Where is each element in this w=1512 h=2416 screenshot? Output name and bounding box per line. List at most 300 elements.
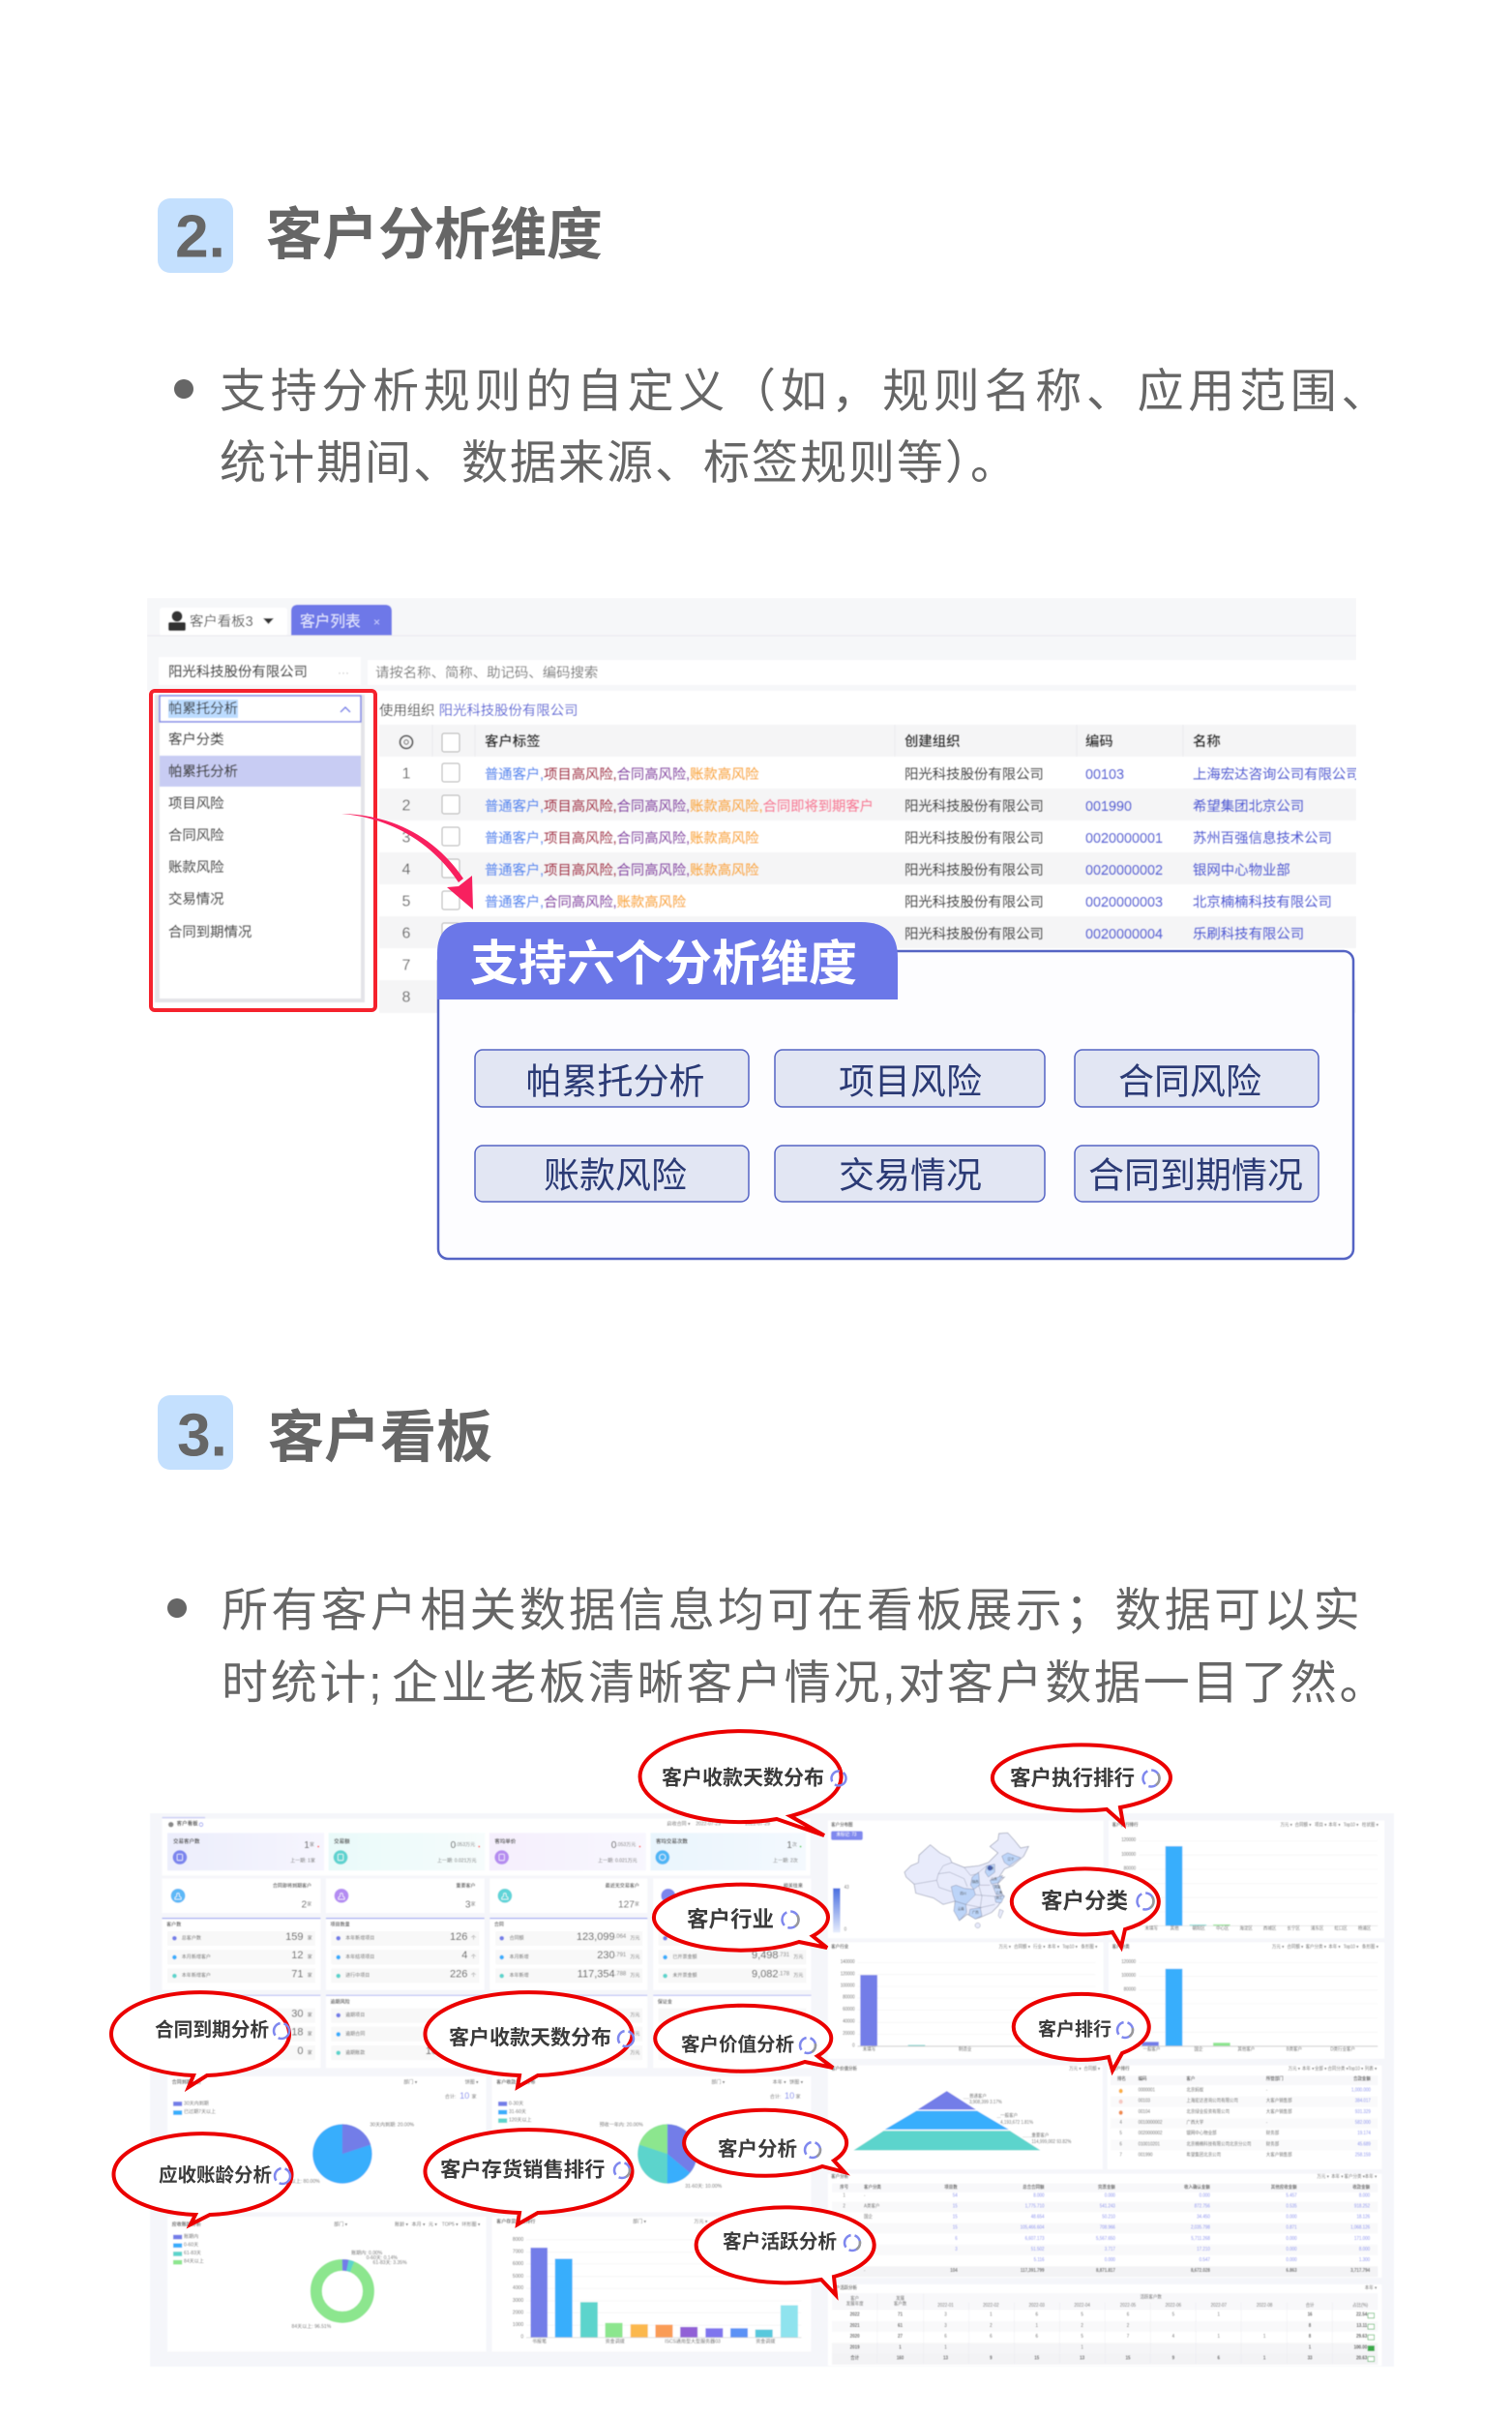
- table: customer activity: 1: [1081, 2344, 1083, 2351]
- table: customer activity: 1: [899, 2344, 902, 2351]
- table rows: 普通客户,项目高风险,合同高风险,账款高风险: [485, 766, 759, 783]
- metric cards row 1: 71: [291, 1968, 304, 1980]
- table rows: 5: [402, 894, 411, 910]
- table: customer analysis: 8.000: [1359, 2192, 1370, 2199]
- chart: receipt days pie: 部门 ▾: [711, 2078, 726, 2085]
- chart: receivables aging donut: TOP5 ▾: [442, 2222, 459, 2227]
- callout: 客户分类: 客户分类: [1041, 1889, 1128, 1914]
- chart: receipt days pie: 0-30天: [509, 2101, 523, 2106]
- bar chart: customer category: 国企: [1195, 2045, 1203, 2053]
- metric cards row 1: 家: [308, 1972, 312, 1979]
- table: customer activity: 合计: [1306, 2302, 1315, 2309]
- bar chart: customer category: B类客户: [1287, 2045, 1302, 2053]
- dimension button: 账款风险: [475, 1146, 749, 1202]
- KPI cards: 2家: [302, 1899, 311, 1910]
- chart: inventory sales ranking bars: 4000: [513, 2285, 523, 2291]
- dimension button: 账款风险: 账款风险: [544, 1155, 687, 1196]
- table: customer analysis: 收入确认金额: [1184, 2184, 1210, 2191]
- callout: 客户价值分析: 客户价值分析: [681, 2034, 794, 2055]
- callout: 客户分类: [1012, 1868, 1159, 1947]
- chart: inventory sales ranking bars: 0: [520, 2334, 523, 2340]
- table: customer analysis: 3.717: [1105, 2247, 1115, 2252]
- table rows: 阳光科技股份有限公司: [904, 894, 1044, 910]
- table: customer analysis: 8,672.028: [1191, 2268, 1210, 2274]
- table: customer activity: 15: [1125, 2355, 1131, 2362]
- table rows: 阳光科技股份有限公司: [904, 862, 1044, 879]
- table: customer ranking: 上海宏达咨询公司有限公司: [1186, 2097, 1238, 2104]
- table: customer analysis: 客户分类 ▾: [1345, 2173, 1366, 2180]
- table rows: 8: [402, 989, 411, 1006]
- bar chart: execution ranking: 本年 ▾: [1328, 1821, 1341, 1829]
- table rows: 3: [402, 830, 411, 846]
- chart: contract expiry pie: 10: [460, 2091, 469, 2101]
- table: customer ranking: 客户排行: [1112, 2065, 1130, 2073]
- table rows: [379, 763, 1360, 1013]
- table: customer activity: 29.63: [1356, 2334, 1368, 2340]
- table: customer ranking: [1108, 2065, 1381, 2169]
- callout: 客户行业: [654, 1885, 828, 1951]
- metric cards row 1: 本月新增: [509, 1954, 529, 1960]
- KPI cards: 相关往来: [784, 1883, 803, 1890]
- table: customer ranking: 0020000002: [1139, 2131, 1163, 2136]
- stat cards row: 上一期: 0.021万元: [598, 1858, 637, 1864]
- chart: receivables aging donut: [167, 2217, 487, 2352]
- metric cards row 1: 万元: [793, 1954, 803, 1960]
- pyramid: customer value: 普通客户: [969, 2093, 987, 2100]
- bar chart: customer category: 其他客户: [1237, 2045, 1255, 2053]
- table: customer activity: 6: [1127, 2312, 1130, 2318]
- table: customer analysis: 1,775.710: [1025, 2203, 1045, 2210]
- table: customer analysis: 8.000: [1033, 2192, 1045, 2199]
- table: customer ranking: 银网中心物业部: [1186, 2130, 1217, 2136]
- table: customer analysis: 客户分类: [864, 2184, 881, 2191]
- table: customer ranking: 0000001: [1139, 2087, 1155, 2094]
- table: customer activity: 2022-07: [1211, 2303, 1227, 2309]
- bar chart: customer category: D类行业客户: [1330, 2045, 1355, 2053]
- callout: 客户活跃分析: [697, 2207, 875, 2295]
- table: customer activity: 2022-01: [937, 2303, 954, 2309]
- panel: six analysis dimensions: [437, 922, 1353, 1259]
- table: customer activity: 15: [1034, 2355, 1040, 2362]
- map: China customer distribution: [904, 1833, 1028, 1928]
- metric cards row 2: 万元: [630, 2050, 639, 2056]
- table: customer activity: 1: [1218, 2334, 1220, 2340]
- bar chart: execution ranking: [1109, 1821, 1384, 1938]
- table: customer analysis: 6.863: [1286, 2268, 1297, 2274]
- bar chart: customer category: 合同额 ▾: [1287, 1943, 1304, 1951]
- tabs: 客户看板3: [190, 613, 253, 630]
- table: customer analysis: 54: [953, 2192, 958, 2199]
- table rows: 4: [402, 861, 411, 879]
- metric cards row 1: 总客户数: [182, 1934, 201, 1941]
- metric cards row 2: 30: [291, 2009, 304, 2019]
- bar chart: execution ranking: 客户执行排行: [1112, 1821, 1139, 1829]
- table: customer analysis: 3,717.794: [1350, 2268, 1370, 2274]
- table: customer activity: 3: [944, 2323, 947, 2329]
- stat cards row: [163, 1817, 811, 1875]
- callout: 客户活跃分析: 客户活跃分析: [723, 2231, 837, 2252]
- table: customer ranking: -: [1266, 2088, 1268, 2094]
- bar chart: customer industry: 行业 ▾: [1033, 1943, 1046, 1951]
- table: customer analysis: 5.457: [1286, 2192, 1297, 2199]
- bar chart: execution ranking: 120000: [1121, 1837, 1136, 1843]
- chart: receivables aging donut: 61-83天: 3.35%: [373, 2260, 407, 2266]
- map: China customer distribution: 上海: [995, 1890, 1003, 1894]
- table: customer analysis: 6: [955, 2236, 958, 2242]
- stat cards row: 交易额: [334, 1837, 350, 1845]
- metric cards row 1: 家: [308, 1934, 312, 1941]
- table header: [379, 725, 1356, 757]
- callout: 客户价值分析: [655, 2006, 833, 2072]
- bar chart: execution ranking: Top10 ▾: [1344, 1822, 1359, 1829]
- chart: receipt days pie: [492, 2076, 812, 2212]
- map: China customer distribution: 河南: [994, 1885, 1001, 1890]
- table: customer ranking: 合同分类 ▾: [1327, 2065, 1349, 2073]
- metric cards row 1: 12: [291, 1950, 304, 1961]
- table: customer analysis: 0.000: [1286, 2236, 1297, 2242]
- bar chart: customer category: 条形图 ▾: [1362, 1943, 1379, 1951]
- table: customer analysis: 0.000: [1200, 2192, 1210, 2199]
- table rows: 6: [402, 925, 411, 942]
- table: customer ranking: 北京蚂蚁: [1186, 2086, 1203, 2094]
- bar chart: execution ranking: 虹口区: [1334, 1924, 1348, 1932]
- customer distribution panel: 客户分布图: [831, 1821, 853, 1829]
- organisation select and search box: 阳光科技股份有限公司: [168, 664, 308, 680]
- dimension button: 项目风险: [775, 1050, 1045, 1107]
- table: customer activity: 33: [1308, 2355, 1313, 2362]
- table: customer activity: 2022-03: [1029, 2303, 1045, 2309]
- callout: 客户存货销售排行: [425, 2130, 632, 2224]
- metric cards row 2: 保证金: [658, 1999, 672, 2006]
- table: customer activity: 2021: [850, 2323, 860, 2329]
- dropdown list: 帕累托分析: [168, 701, 238, 717]
- metric cards row 1: 未开票金额: [672, 1972, 697, 1979]
- table: customer activity: 客户数: [894, 2300, 906, 2308]
- stat cards row: 上一期: 2次: [773, 1858, 798, 1864]
- callout: 客户收款天数分布 (top): [640, 1731, 845, 1835]
- tabs: [147, 605, 1356, 636]
- bar chart: customer industry: 80000: [843, 1994, 855, 2001]
- table: customer activity: 2020: [850, 2334, 860, 2340]
- table: customer activity: 2022-08: [1257, 2303, 1273, 2309]
- table rows: 1: [402, 766, 411, 782]
- chart: inventory sales ranking bars: 部门 ▾: [633, 2219, 647, 2225]
- table: customer activity: 160: [897, 2355, 904, 2362]
- metric cards row 2: 0: [297, 2045, 304, 2057]
- table: customer ranking: 00104: [1139, 2109, 1150, 2115]
- KPI cards: 3家: [465, 1899, 476, 1910]
- table: customer activity: 8: [1309, 2334, 1312, 2340]
- stat cards row: 0.053万元: [451, 1840, 475, 1851]
- table header: 创建组织: [904, 732, 961, 750]
- table: customer analysis: 2: [843, 2203, 845, 2210]
- table: customer analysis: 104: [950, 2268, 958, 2274]
- chart: receivables aging donut: 账龄 ▾: [395, 2221, 409, 2227]
- callout: 客户排行: 客户排行: [1038, 2018, 1112, 2040]
- table: customer ranking: 万元 ▾: [1289, 2066, 1301, 2073]
- bar chart: customer category: 100000: [1121, 1973, 1136, 1979]
- stat cards row: 2022-07-29: [745, 1822, 770, 1828]
- bar chart: execution ranking: 西城区: [1263, 1924, 1277, 1932]
- chart: receipt days pie: 10: [785, 2091, 794, 2101]
- table: customer activity: 13: [1080, 2355, 1084, 2362]
- bar chart: customer industry: 120000: [841, 1971, 855, 1977]
- table: customer activity: 2022-02: [983, 2303, 999, 2309]
- chart: receivables aging donut: 部门 ▾: [334, 2221, 348, 2227]
- table: customer analysis: 8,871.817: [1096, 2268, 1115, 2274]
- table: customer ranking: 4: [1119, 2120, 1122, 2126]
- chart: contract expiry pie: 已过期7天以上: 80.00%: [269, 2178, 320, 2185]
- table: customer ranking: 00103: [1139, 2098, 1150, 2104]
- chart: contract expiry pie: 合计:: [445, 2094, 456, 2100]
- table: customer analysis: 0.000: [1286, 2257, 1297, 2263]
- table: customer activity: 2022-06: [1166, 2303, 1181, 2309]
- bar chart: execution ranking: 未填写: [1145, 1924, 1158, 1932]
- table: customer analysis: -: [864, 2269, 866, 2274]
- table: customer activity: 3: [944, 2312, 947, 2318]
- KPI cards: 合同即将到期客户: [273, 1883, 311, 1890]
- table: customer analysis: 50.210: [1102, 2214, 1115, 2221]
- customer distribution panel: 43: [845, 1885, 849, 1891]
- table: customer ranking: 财务部: [1266, 2130, 1279, 2136]
- chart: contract expiry pie: 家: [471, 2094, 477, 2100]
- metric cards row 1: 126: [450, 1931, 467, 1943]
- table: customer activity: 2: [990, 2323, 993, 2329]
- table: customer analysis: 5,567.650: [1096, 2236, 1115, 2242]
- table: customer activity: 2: [1127, 2323, 1130, 2329]
- table: customer analysis: 18.126: [1356, 2214, 1370, 2221]
- table: customer activity: 5: [1172, 2312, 1174, 2318]
- table: customer analysis: 本年 ▾: [1365, 2173, 1378, 2180]
- bar chart: customer industry: [828, 1942, 1104, 2059]
- table rows: 2: [402, 797, 411, 815]
- metric cards row 1: 本年新增: [509, 1972, 529, 1979]
- chart: contract expiry pie: 30天内到期: 20.00%: [370, 2121, 415, 2128]
- table: customer ranking: 全部 ▾: [1315, 2065, 1327, 2073]
- table: customer ranking: 45.689: [1357, 2141, 1371, 2148]
- bar chart: customer category: 本年 ▾: [1328, 1943, 1341, 1951]
- table: customer analysis: 1: [843, 2192, 845, 2199]
- table: customer activity: 活跃客户数: [1140, 2293, 1162, 2301]
- metric cards row 1: 合同额: [509, 1934, 524, 1941]
- chart: receivables aging donut: 61-83天: [184, 2251, 201, 2256]
- dropdown list: 交易情况: [168, 890, 224, 908]
- stat cards row: 客均交易次数: [656, 1837, 688, 1845]
- table: customer activity: 6: [1218, 2355, 1220, 2362]
- metric cards row 1: 进行中项目: [345, 1972, 370, 1979]
- badge: number 3: 3.: [177, 1403, 227, 1469]
- table: customer analysis: 1.300: [1359, 2257, 1370, 2263]
- table rows: 阳光科技股份有限公司: [904, 926, 1044, 942]
- table: customer ranking: 大客户销售部: [1266, 2097, 1292, 2104]
- table: customer activity: 6: [1035, 2334, 1038, 2340]
- table: customer activity: 6: [990, 2334, 993, 2340]
- table rows: 阳光科技股份有限公司: [904, 798, 1044, 815]
- chart: inventory sales ranking bars: 3000: [513, 2298, 523, 2304]
- chart: inventory sales ranking bars: 万元 ▾: [694, 2220, 708, 2225]
- table: customer activity: 71: [898, 2312, 903, 2318]
- table: customer analysis: 8.000: [1359, 2247, 1370, 2252]
- pyramid: customer value: 合同额 ▾: [1083, 2065, 1101, 2073]
- chart: receivables aging donut: 应收账龄分析: [172, 2221, 201, 2227]
- bar chart: execution ranking: 项目 ▾: [1315, 1822, 1327, 1829]
- bar chart: execution ranking: 合同额 ▾: [1295, 1821, 1312, 1829]
- section 2 bullet text: 支持分析规则的自定义（如，规则名称、应用范围、: [220, 366, 1392, 418]
- chart: receivables aging donut: 0-60天: 0.14%: [367, 2255, 398, 2261]
- section 2 bullet text: 统计期间、数据来源、标签规则等）。: [220, 437, 1019, 490]
- dropdown list: 账款风险: [168, 859, 224, 876]
- table: customer analysis: 国企: [864, 2213, 873, 2221]
- table: customer activity: 8: [1309, 2323, 1312, 2329]
- bar chart: customer category: 120000: [1121, 1959, 1136, 1965]
- callout: 客户存货销售排行: 客户存货销售排行: [440, 2158, 605, 2181]
- title: 客户看板: 客户看板: [268, 1407, 492, 1469]
- chart: receipt days pie: 本年 ▾: [773, 2078, 786, 2085]
- chart: receipt days pie: 120天以上: [509, 2116, 532, 2123]
- chart: inventory sales ranking bars: 6000: [513, 2261, 523, 2267]
- metric cards row 2: [163, 1995, 812, 2068]
- chart: inventory sales ranking bars: 2000: [513, 2310, 523, 2315]
- bar chart: customer industry: 本年 ▾: [1048, 1943, 1060, 1951]
- table header: 编码: [1085, 732, 1113, 750]
- metric cards row 1: 万元: [630, 1935, 639, 1941]
- bar chart: customer category: [1109, 1942, 1384, 2059]
- bar chart: execution ranking: 其他: [1171, 1924, 1179, 1932]
- table: customer activity: 5: [1081, 2312, 1083, 2318]
- pyramid: customer value: 114,999,002 93.82%: [1031, 2139, 1072, 2145]
- table rows: 0020000001: [1085, 831, 1163, 847]
- dimension button: 合同到期情况: 合同到期情况: [1088, 1155, 1303, 1196]
- stat cards row: 2022-07-29: [696, 1822, 721, 1828]
- badge: number 2: 2.: [175, 203, 225, 271]
- map: China customer distribution: 北京: [988, 1865, 994, 1870]
- table: customer ranking: 客户: [1186, 2075, 1196, 2082]
- table: customer analysis: 5,711.268: [1191, 2236, 1210, 2242]
- table header: 名称: [1193, 732, 1221, 750]
- table: customer analysis: 51.502: [1031, 2247, 1045, 2252]
- bar chart: customer industry: 60000: [843, 2007, 855, 2013]
- table: customer activity: 7: [1127, 2334, 1130, 2340]
- callout: 客户分析: 客户分析: [718, 2137, 797, 2161]
- table rows: 苏州百强信息技术公司: [1193, 830, 1332, 847]
- metric cards row 1: 家: [308, 1954, 312, 1960]
- table: customer ranking: 258.159: [1355, 2152, 1371, 2159]
- metric cards row 1: 9,498.731: [752, 1950, 790, 1961]
- organisation select and search box: ···: [338, 666, 349, 679]
- table: customer activity: 9: [1172, 2355, 1174, 2362]
- panel heading tab: [437, 922, 898, 999]
- chart: receipt days pie: 合计:: [770, 2094, 781, 2100]
- bar chart: customer industry: 20000: [843, 2031, 855, 2037]
- pyramid: customer value: 重要客户: [1031, 2132, 1049, 2139]
- table: customer analysis: 完票金额: [1098, 2184, 1115, 2191]
- table: customer ranking: 北京绿业投资有限公司: [1186, 2108, 1230, 2115]
- chart: inventory sales ranking bars: ISCS通用型大型服务器03: [665, 2339, 721, 2344]
- map: China customer distribution: 辽宁: [1008, 1856, 1015, 1861]
- table: customer analysis: [828, 2173, 1381, 2278]
- chart: receipt days pie: 预收一年内: 20.00%: [600, 2121, 643, 2128]
- stat cards row: 上一期: 0.021万元: [437, 1858, 477, 1864]
- table: customer analysis: -: [864, 2193, 866, 2199]
- table: customer activity: 4: [1172, 2334, 1174, 2340]
- table: customer activity: 1: [1035, 2323, 1038, 2329]
- table: customer activity: 13: [943, 2355, 948, 2362]
- dimension button: 交易情况: 交易情况: [839, 1155, 982, 1196]
- dropdown list: 帕累托分析: [168, 763, 238, 780]
- stat cards row: 交易客户数: [173, 1837, 200, 1845]
- table: customer ranking: 7: [1119, 2152, 1122, 2159]
- table rows: 普通客户,项目高风险,合同高风险,账款高风险: [485, 862, 759, 879]
- table: customer analysis: 5.116: [1034, 2257, 1045, 2263]
- table: customer analysis: 3: [955, 2247, 958, 2252]
- chart: inventory sales ranking bars: 5000: [513, 2274, 523, 2280]
- chart: contract expiry pie: [167, 2076, 487, 2212]
- bar chart: customer industry: 万元 ▾: [999, 1944, 1012, 1951]
- table rows: 普通客户,项目高风险,合同高风险,账款高风险,合同即将到期客户: [485, 798, 874, 815]
- metric cards row 2: 10: [426, 2045, 437, 2057]
- stat cards row: 客均单价: [494, 1837, 517, 1845]
- metric cards row 1: 个: [471, 1954, 476, 1960]
- table: customer analysis: 项目数: [944, 2184, 958, 2191]
- stat cards row: 上一期: 1家: [290, 1858, 315, 1864]
- table: customer activity: 27: [898, 2334, 903, 2340]
- table rows: 希望集团北京公司: [1193, 798, 1304, 815]
- map: China customer distribution: 广西: [972, 1909, 979, 1914]
- metric cards row 1: [163, 1918, 812, 1990]
- table: customer ranking: 列表 ▾: [1365, 2065, 1378, 2073]
- bar chart: execution ranking: 长宁区: [1287, 1924, 1300, 1932]
- bar chart: execution ranking: 80000: [1124, 1865, 1136, 1872]
- table: customer analysis: 117,391.799: [1021, 2268, 1045, 2274]
- map: China customer distribution: 四川: [960, 1892, 966, 1895]
- metric cards row 1: 项目数量: [331, 1922, 350, 1928]
- metric cards row 2: 家: [308, 2012, 312, 2018]
- customer distribution panel: [828, 1821, 1104, 1938]
- metric cards row 2: 逾期账款: [345, 2049, 365, 2056]
- table: customer analysis: 6,607.173: [1025, 2236, 1045, 2242]
- metric cards row 2: 逾期风险: [331, 1999, 350, 2006]
- table rows: 00103: [1085, 767, 1124, 783]
- table: customer analysis: 171.000: [1354, 2236, 1370, 2242]
- table: customer analysis: 序号: [840, 2184, 848, 2191]
- table: customer ranking: 希望集团北京公司: [1186, 2151, 1221, 2159]
- table: customer activity: 16: [1308, 2312, 1313, 2318]
- chart: receivables aging donut: 84天以上: 96.51%: [292, 2323, 332, 2330]
- dropdown list: 合同风险: [168, 827, 224, 844]
- table: customer analysis: 105,466.604: [1021, 2224, 1045, 2231]
- table: customer analysis: 17.210: [1197, 2247, 1210, 2252]
- table: customer activity: 1: [1218, 2312, 1220, 2318]
- table: customer ranking: 所管部门: [1266, 2075, 1284, 2082]
- table: customer ranking: 编码: [1139, 2075, 1147, 2082]
- callout: 客户收款天数分布 (top): 客户收款天数分布: [662, 1767, 824, 1790]
- organisation row: 使用组织 阳光科技股份有限公司: [379, 702, 578, 719]
- bar chart: customer industry: 100000: [841, 1983, 855, 1989]
- title: 客户分析维度: 客户分析维度: [266, 203, 603, 267]
- red highlight frame: [151, 691, 375, 1010]
- chart: receipt days pie: 31-60天: 10.00%: [685, 2184, 723, 2190]
- table: customer analysis: 总合合同额: [1023, 2184, 1045, 2191]
- table: customer ranking: 0010000002: [1139, 2120, 1163, 2126]
- chart: inventory sales ranking bars: 7000: [513, 2250, 523, 2255]
- bar chart: execution ranking: 浦东区: [1311, 1924, 1324, 1932]
- table: customer analysis: 0.547: [1200, 2257, 1210, 2263]
- table: customer analysis: 0.871: [1286, 2224, 1297, 2231]
- table: customer analysis: 本年 ▾: [1331, 2173, 1344, 2180]
- bar chart: customer category: Top10 ▾: [1344, 1944, 1359, 1951]
- table: customer activity: 1: [1309, 2344, 1312, 2351]
- table: customer analysis: 48.654: [1031, 2214, 1045, 2221]
